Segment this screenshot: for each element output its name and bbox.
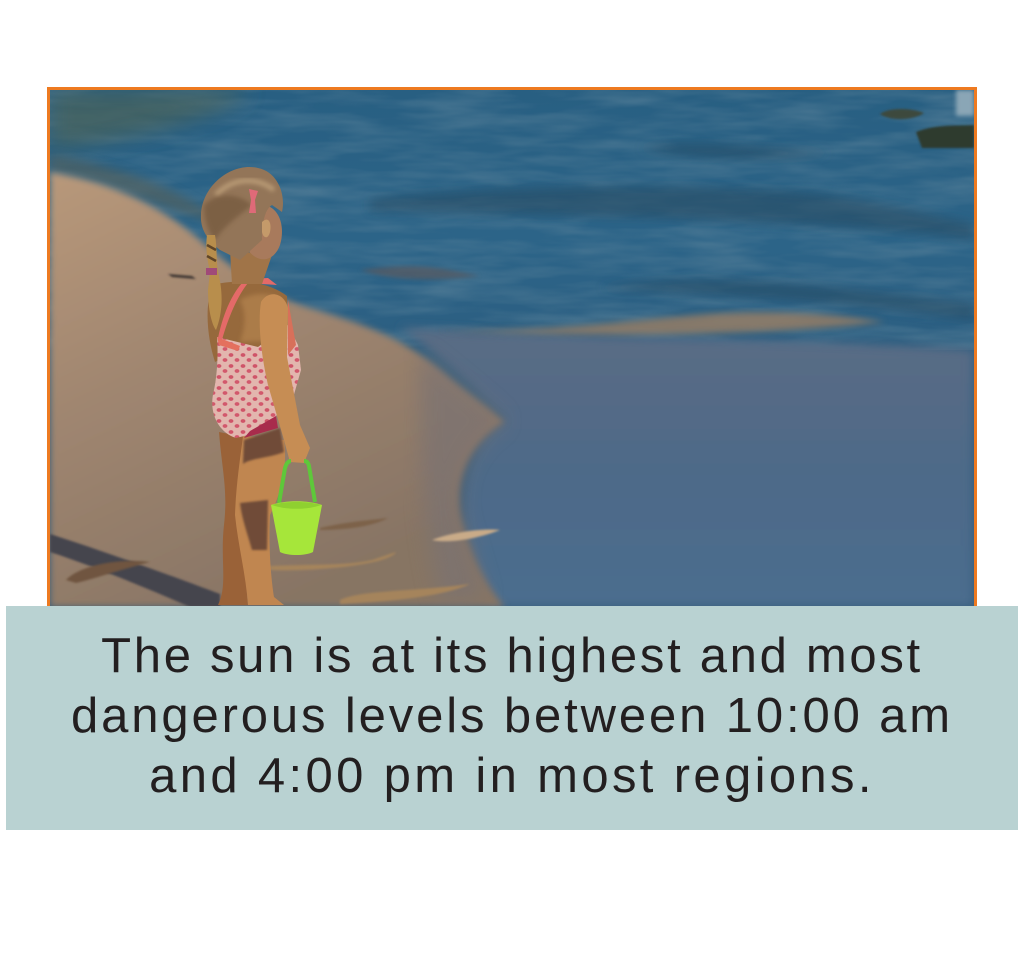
caption text: The sun is at its highest and most [101,629,923,683]
child [201,167,310,605]
foam line [437,312,885,335]
braid [206,235,222,330]
knee shadow [240,500,268,550]
left leg [218,432,250,605]
sea [50,90,974,607]
ripple mark [360,266,480,279]
hair [201,167,283,260]
hair tie [206,268,217,275]
bucket [271,461,322,555]
swimsuit frill [244,416,278,438]
footprints in the sand [66,274,500,604]
photo: child on beach with green bucket [47,87,977,606]
right leg [235,436,285,605]
rocks [880,90,974,148]
hair clip [249,189,258,213]
back and far arm [208,282,288,362]
sand [50,172,505,607]
wet sand [400,328,974,607]
sea texture [50,90,974,350]
swimsuit straps [218,278,277,340]
swimsuit [212,325,301,438]
neck and head [230,250,272,284]
near-shore brown shallows [50,154,202,222]
greenish water top left [50,90,250,150]
front arm [260,294,310,463]
ear [262,220,271,237]
thigh shadow [243,428,284,464]
caption text: dangerous levels between 10:00 am [71,689,953,743]
shadow on sand [50,534,220,607]
caption text [71,629,953,803]
caption text: and 4:00 pm in most regions. [149,749,875,803]
sand to water transition [420,350,505,600]
caption panel [6,606,1018,830]
